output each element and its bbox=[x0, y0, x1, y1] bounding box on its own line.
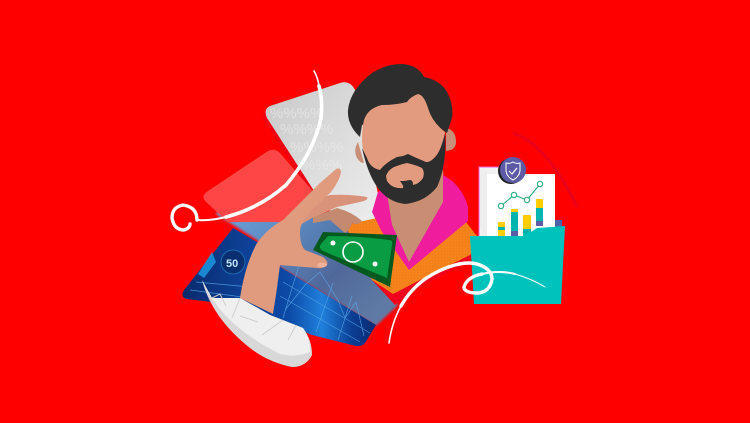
panel: translucent red card bbox=[203, 150, 318, 222]
beard bbox=[362, 133, 445, 204]
folder: teal bbox=[470, 226, 565, 304]
percent pattern: %%%% bbox=[270, 105, 323, 122]
data dial: 50 bbox=[226, 258, 238, 270]
white swirl: upper bbox=[172, 71, 322, 230]
chart grid lines bbox=[190, 262, 370, 342]
icon: banknote bbox=[313, 232, 397, 287]
bar chart bbox=[498, 199, 543, 236]
far finger bbox=[313, 208, 362, 233]
data dial bbox=[221, 250, 245, 274]
percent pattern: %%%% bbox=[290, 139, 343, 156]
hair bbox=[348, 64, 452, 137]
collar: pink bbox=[372, 175, 468, 270]
panel: blurred blue photo bbox=[216, 205, 398, 326]
percent pattern bbox=[270, 105, 343, 174]
shirt back band bbox=[372, 250, 474, 305]
panel: gray percent card bbox=[262, 82, 385, 225]
sleeve cuff bbox=[202, 280, 312, 367]
palm and arm bbox=[240, 168, 341, 314]
percent pattern: %%%% bbox=[280, 121, 333, 138]
white swirl: lower bbox=[389, 263, 545, 343]
face bbox=[362, 94, 445, 190]
shirt: orange bbox=[345, 214, 480, 294]
decorative dark arc bbox=[513, 133, 577, 207]
icon: security shield badge bbox=[498, 157, 526, 184]
document: front report bbox=[480, 170, 555, 238]
line chart bbox=[498, 181, 543, 209]
hand bbox=[240, 168, 367, 314]
ears bbox=[355, 128, 456, 163]
neck bbox=[383, 170, 446, 262]
folder tab bbox=[555, 220, 562, 230]
middle finger bbox=[300, 195, 367, 225]
document: back sheet bbox=[479, 167, 509, 237]
panel: blue data chart bbox=[182, 228, 376, 346]
percent pattern: %%% bbox=[302, 157, 342, 174]
